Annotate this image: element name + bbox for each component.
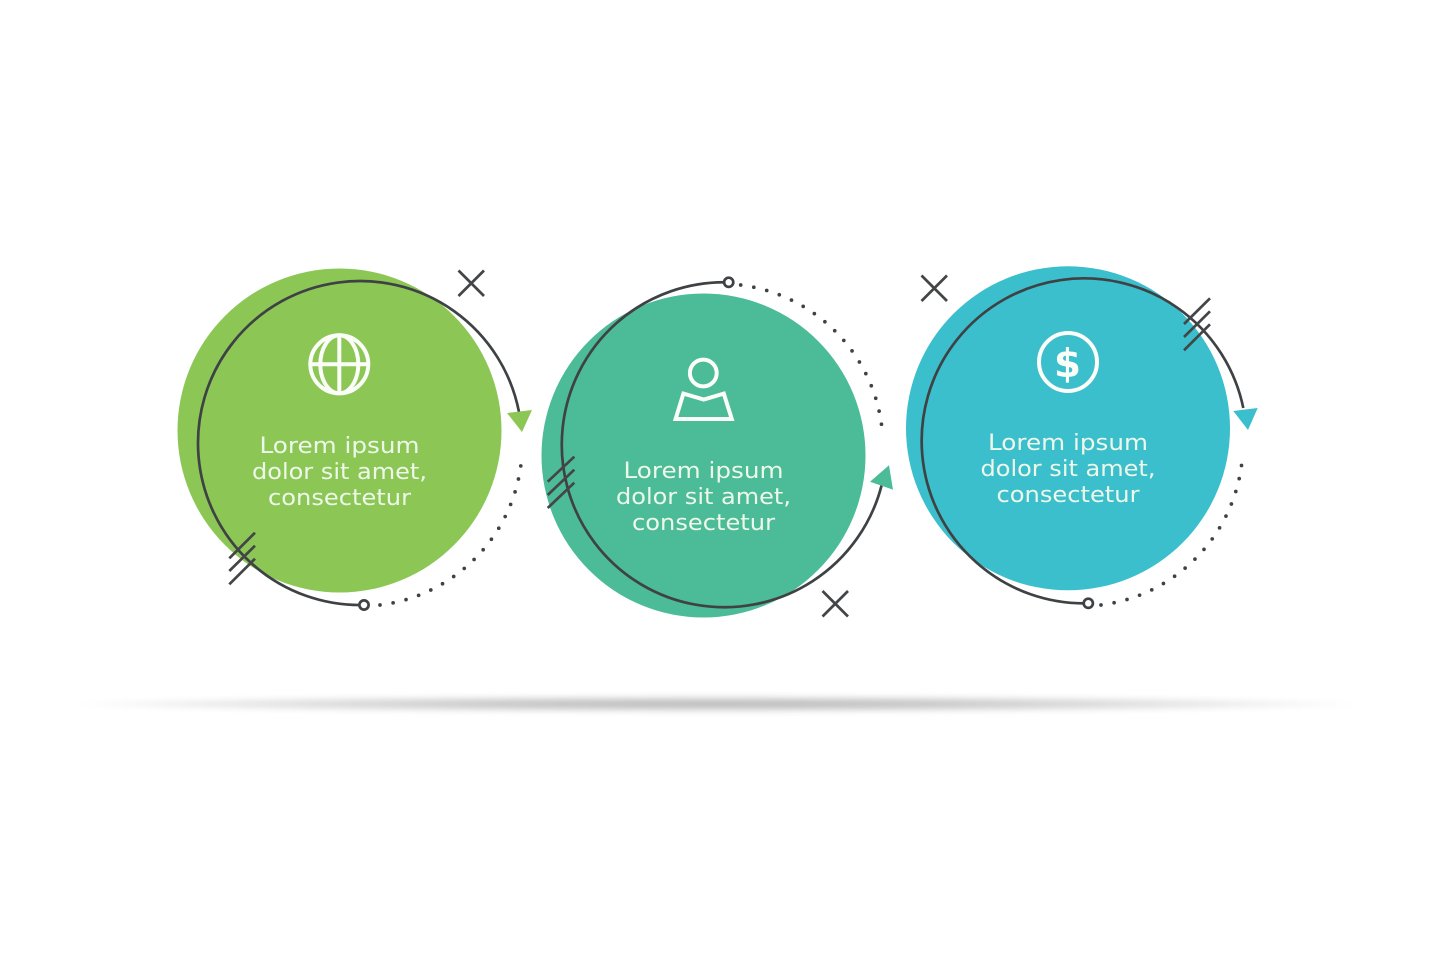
ring arc [198, 281, 519, 605]
text: step 3 label [980, 430, 1156, 508]
dotted arc [1101, 453, 1243, 605]
hatch mark [548, 457, 574, 508]
arc start node [359, 600, 369, 610]
arc start node [1084, 599, 1093, 608]
green disc [178, 268, 502, 592]
arrowhead [1233, 408, 1258, 430]
hatch mark [229, 533, 255, 584]
text: step 2 label: Lorem ipsum [624, 458, 784, 484]
dotted arc [741, 285, 883, 437]
cross mark [922, 276, 947, 301]
panel: step 3 cyan [906, 266, 1258, 608]
icon: globe [310, 335, 368, 393]
cross mark [822, 591, 848, 616]
teal green disc [542, 294, 866, 618]
ring arc [922, 278, 1243, 603]
dotted arc [380, 453, 522, 605]
text: step 2 label: dolor sit amet, [616, 484, 791, 510]
icon: dollar coin: $ [1054, 342, 1081, 387]
text: step 1 label: Lorem ipsum [260, 433, 420, 459]
text: step 3 label: consectetur [996, 482, 1140, 508]
icon: dollar coin [1039, 333, 1097, 391]
arrowhead [870, 465, 893, 490]
cyan disc [906, 266, 1230, 590]
arrowhead [507, 410, 532, 432]
text: step 1 label: dolor sit amet, [252, 459, 427, 485]
text: step 1 label [252, 433, 427, 511]
text: step 2 label [616, 458, 791, 536]
text: step 3 label: dolor sit amet, [980, 456, 1156, 482]
text: step 1 label: consectetur [268, 485, 412, 511]
text: step 3 label: Lorem ipsum [988, 430, 1148, 456]
text: step 2 label: consectetur [632, 510, 776, 536]
arc start node [724, 278, 733, 287]
icon: person with map [676, 360, 732, 419]
ground shadow [67, 695, 1367, 713]
ring arc [562, 282, 882, 607]
cross mark [458, 270, 484, 296]
panel: step 2 teal green [542, 278, 893, 618]
hatch mark [1184, 298, 1210, 350]
panel: step 1 green [178, 268, 532, 610]
